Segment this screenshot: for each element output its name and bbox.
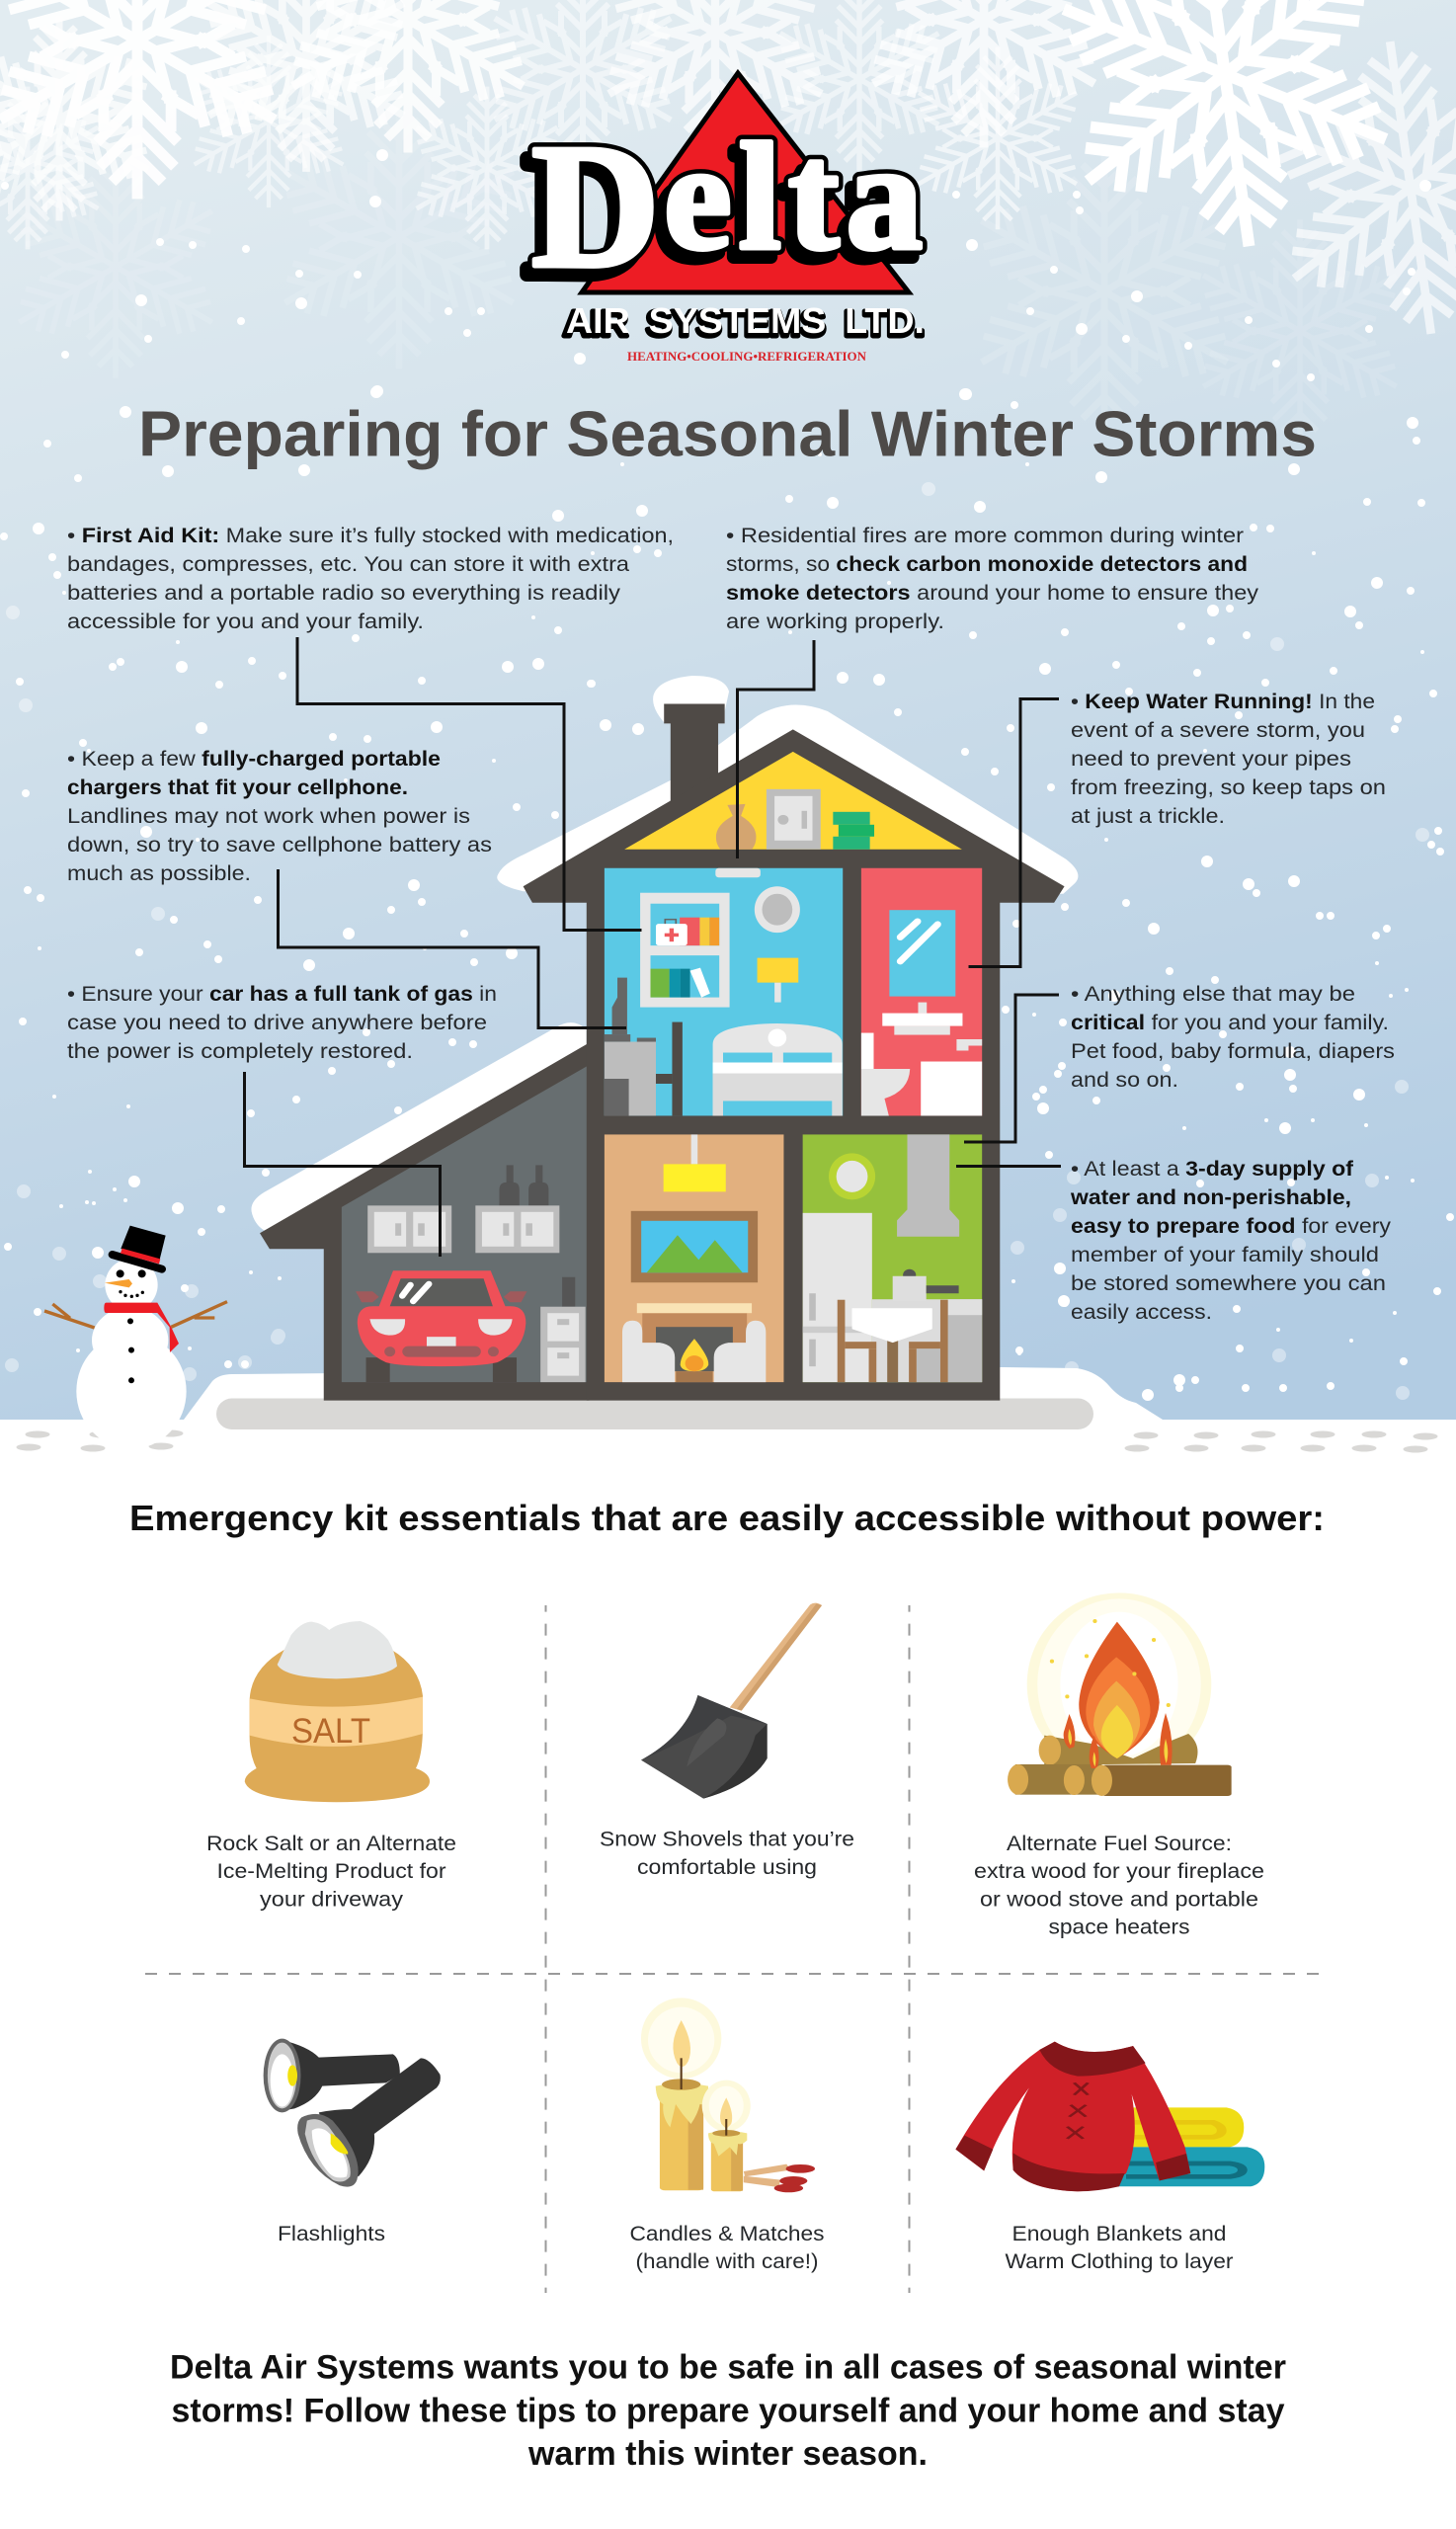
snowman — [44, 1226, 227, 1449]
caption: alternate fuel: space heaters — [1049, 1915, 1189, 1938]
fireplace — [637, 1303, 752, 1382]
sky background — [0, 0, 1456, 1420]
icon: flashlights — [264, 2039, 441, 2187]
tip: keep water running: at just a trickle. — [1071, 804, 1225, 828]
icon: attic safe — [767, 789, 821, 850]
title: Preparing for Seasonal Winter Storms — [138, 397, 1317, 470]
caption: rock salt: Ice-Melting Product for — [217, 1859, 446, 1883]
chimney snow — [653, 676, 729, 723]
snowman face — [105, 1269, 146, 1298]
caption: candles — [630, 2222, 824, 2273]
caption: blankets and clothing: Warm Clothing to layer — [1006, 2249, 1233, 2273]
snowman arms — [44, 1302, 227, 1328]
grid dividers — [136, 1605, 1319, 2293]
garage roof snow — [251, 1022, 587, 1232]
caption: snow shovels: comfortable using — [637, 1855, 817, 1879]
tip: keep water running: • Keep Water Running! In the — [1071, 690, 1375, 713]
tip: first aid kit: bandages, compresses, etc. You can store it with extra — [67, 552, 629, 576]
icon: attic boxes — [833, 812, 874, 850]
tip: 3-day supply: easy to prepare food for every — [1071, 1214, 1391, 1238]
tip: smoke detectors: smoke detectors around your home to ensure they — [726, 581, 1258, 605]
tip: anything critical: critical for you and your family. — [1071, 1011, 1389, 1034]
bookshelf with first aid kit — [640, 893, 730, 1008]
tip: 3-day supply: be stored somewhere you can — [1071, 1271, 1386, 1295]
closing statement — [170, 2349, 1286, 2473]
tip: first aid kit: accessible for you and your family. — [67, 610, 424, 633]
caption: blankets and clothing: Enough Blankets and — [1011, 2222, 1227, 2245]
tip: full tank of gas: the power is completely restored. — [67, 1039, 413, 1063]
file cabinet — [540, 1277, 586, 1382]
logo wordmark Delta — [524, 108, 930, 313]
tip: smoke detectors: storms, so check carbon monoxide detectors and — [726, 552, 1248, 576]
tip: first aid kit: • First Aid Kit: Make sure it’s fully stocked with medication, — [67, 524, 674, 547]
armchairs — [622, 1321, 766, 1382]
bathtub — [921, 1062, 982, 1115]
closing statement: storms! Follow these tips to prepare yourself and your home and stay — [172, 2393, 1285, 2430]
wall mirror — [755, 886, 800, 933]
caption: alternate fuel: Alternate Fuel Source: — [1007, 1832, 1232, 1855]
bathroom — [861, 868, 982, 1115]
logo triangle — [582, 73, 909, 292]
icon: snow shovel — [641, 1603, 822, 1799]
tip: portable chargers — [67, 747, 492, 885]
logo wordmark Delta: D — [524, 117, 652, 313]
snowman scarf — [104, 1303, 179, 1352]
tip: smoke detectors: are working properly. — [726, 610, 944, 633]
logo wordmark Delta: elta — [656, 121, 922, 290]
snow mound behind house — [184, 1367, 1163, 1420]
tip: 3-day supply: member of your family should — [1071, 1243, 1379, 1266]
tip: 3-day supply — [1070, 1157, 1391, 1324]
tip: full tank of gas — [67, 982, 497, 1063]
logo AIR SYSTEMS LTD: AIR SYSTEMS LTD. — [563, 303, 925, 344]
tip: portable chargers: much as possible. — [67, 861, 251, 885]
tip: keep water running: from freezing, so keep taps on — [1071, 775, 1386, 799]
logo tagline: HEATING•COOLING•REFRIGERATION — [627, 349, 867, 364]
icon: candles and matches — [641, 1998, 815, 2192]
garage cabinets — [367, 1205, 559, 1253]
tip: anything critical: • Anything else that may be — [1071, 982, 1355, 1006]
icon: salt bag: SALT — [291, 1712, 370, 1751]
tip: first aid kit — [67, 524, 674, 633]
caption: candles: Candles & Matches — [630, 2222, 824, 2245]
caption: rock salt — [206, 1832, 456, 1911]
tip: smoke detectors: • Residential fires are more common during winter — [726, 524, 1244, 547]
logo AIR SYSTEMS LTD: AIR SYSTEMS LTD. — [566, 300, 925, 341]
tip: anything critical — [1071, 982, 1395, 1092]
caption: flashlights: Flashlights — [278, 2222, 385, 2245]
tip: portable chargers: down, so try to save cellphone battery as — [67, 833, 492, 857]
main house shell — [524, 729, 1065, 1401]
tip: portable chargers: Landlines may not work when power is — [67, 804, 470, 828]
stove — [872, 1299, 982, 1382]
pendant lamp — [664, 1134, 726, 1191]
living room — [605, 1134, 783, 1382]
dining table and chairs — [838, 1300, 948, 1382]
caption: candles: (handle with care!) — [636, 2249, 818, 2273]
falling snow dots — [4, 155, 1450, 1395]
garage interior — [342, 1067, 587, 1382]
kitchen wall clock — [829, 1153, 875, 1199]
garage shell — [260, 1043, 590, 1401]
desk and bottle with portable chargers — [605, 978, 683, 1115]
icon: salt bag — [245, 1621, 430, 1802]
tip: keep water running: event of a severe storm, you — [1071, 718, 1365, 742]
closing statement: Delta Air Systems wants you to be safe in all cases of seasonal winter — [170, 2349, 1286, 2387]
icon: campfire — [1008, 1592, 1232, 1796]
snowman top hat — [113, 1226, 166, 1269]
tip: portable chargers: chargers that fit your cellphone. — [67, 775, 408, 799]
logo — [524, 73, 930, 364]
tip: 3-day supply: easily access. — [1071, 1300, 1212, 1324]
bathroom mirror — [889, 910, 955, 997]
range hood — [897, 1134, 959, 1237]
caption: snow shovels — [600, 1828, 854, 1879]
section heading: Emergency kit essentials that are easily accessible without power: — [129, 1498, 1325, 1538]
snowman body — [76, 1259, 187, 1449]
caption: alternate fuel — [974, 1832, 1264, 1938]
attic — [624, 752, 962, 850]
main roof snow — [497, 705, 1078, 894]
chimney — [664, 703, 725, 810]
caption: rock salt: Rock Salt or an Alternate — [206, 1832, 456, 1855]
house — [251, 676, 1078, 1401]
background snowflakes — [0, 0, 1456, 440]
closing statement: warm this winter season. — [527, 2435, 928, 2473]
ceiling light — [715, 868, 761, 877]
tip: anything critical: and so on. — [1071, 1068, 1178, 1092]
wall lamp — [758, 958, 798, 1003]
kitchen — [803, 1134, 982, 1382]
bedroom — [605, 868, 843, 1115]
framed picture — [631, 1211, 758, 1282]
icon: sweater and blankets — [955, 2042, 1264, 2191]
fridge — [803, 1213, 872, 1382]
tip: full tank of gas: case you need to drive anywhere before — [67, 1011, 487, 1034]
tip: 3-day supply: water and non-perishable, — [1070, 1185, 1351, 1209]
caption: alternate fuel: extra wood for your fireplace — [974, 1859, 1264, 1883]
footprints in snow — [16, 1430, 1438, 1452]
snowman buttons — [127, 1318, 134, 1383]
caption: alternate fuel: or wood stove and portable — [980, 1887, 1258, 1911]
pot — [893, 1269, 959, 1301]
logo wordmark Delta: D — [531, 108, 660, 304]
red car — [356, 1270, 526, 1382]
road — [216, 1399, 1093, 1429]
tip: anything critical: Pet food, baby formula, diapers — [1071, 1039, 1395, 1063]
tip: smoke detectors — [726, 524, 1258, 633]
toilet — [861, 1033, 910, 1115]
bed — [713, 1023, 843, 1115]
tip: portable chargers: • Keep a few fully-charged portable — [67, 747, 441, 771]
logo wordmark Delta: D — [531, 108, 660, 304]
icon: attic sack — [716, 804, 756, 850]
logo wordmark Delta: elta — [664, 112, 930, 282]
tip: keep water running — [1071, 690, 1386, 828]
tip: 3-day supply: • At least a 3-day supply of — [1071, 1157, 1354, 1181]
tip: keep water running: need to prevent your pipes — [1071, 747, 1351, 771]
caption: blankets and clothing — [1006, 2222, 1233, 2273]
caption: snow shovels: Snow Shovels that you’re — [600, 1828, 854, 1851]
tip: first aid kit: batteries and a portable radio so everything is readily — [67, 581, 620, 605]
sink — [882, 1003, 982, 1051]
caption: rock salt: your driveway — [260, 1887, 403, 1911]
tip: full tank of gas: • Ensure your car has a full tank of gas in — [67, 982, 497, 1006]
logo wordmark Delta: elta — [664, 112, 930, 282]
garage shelf bottles — [499, 1165, 548, 1205]
leader lines — [245, 637, 1061, 1257]
